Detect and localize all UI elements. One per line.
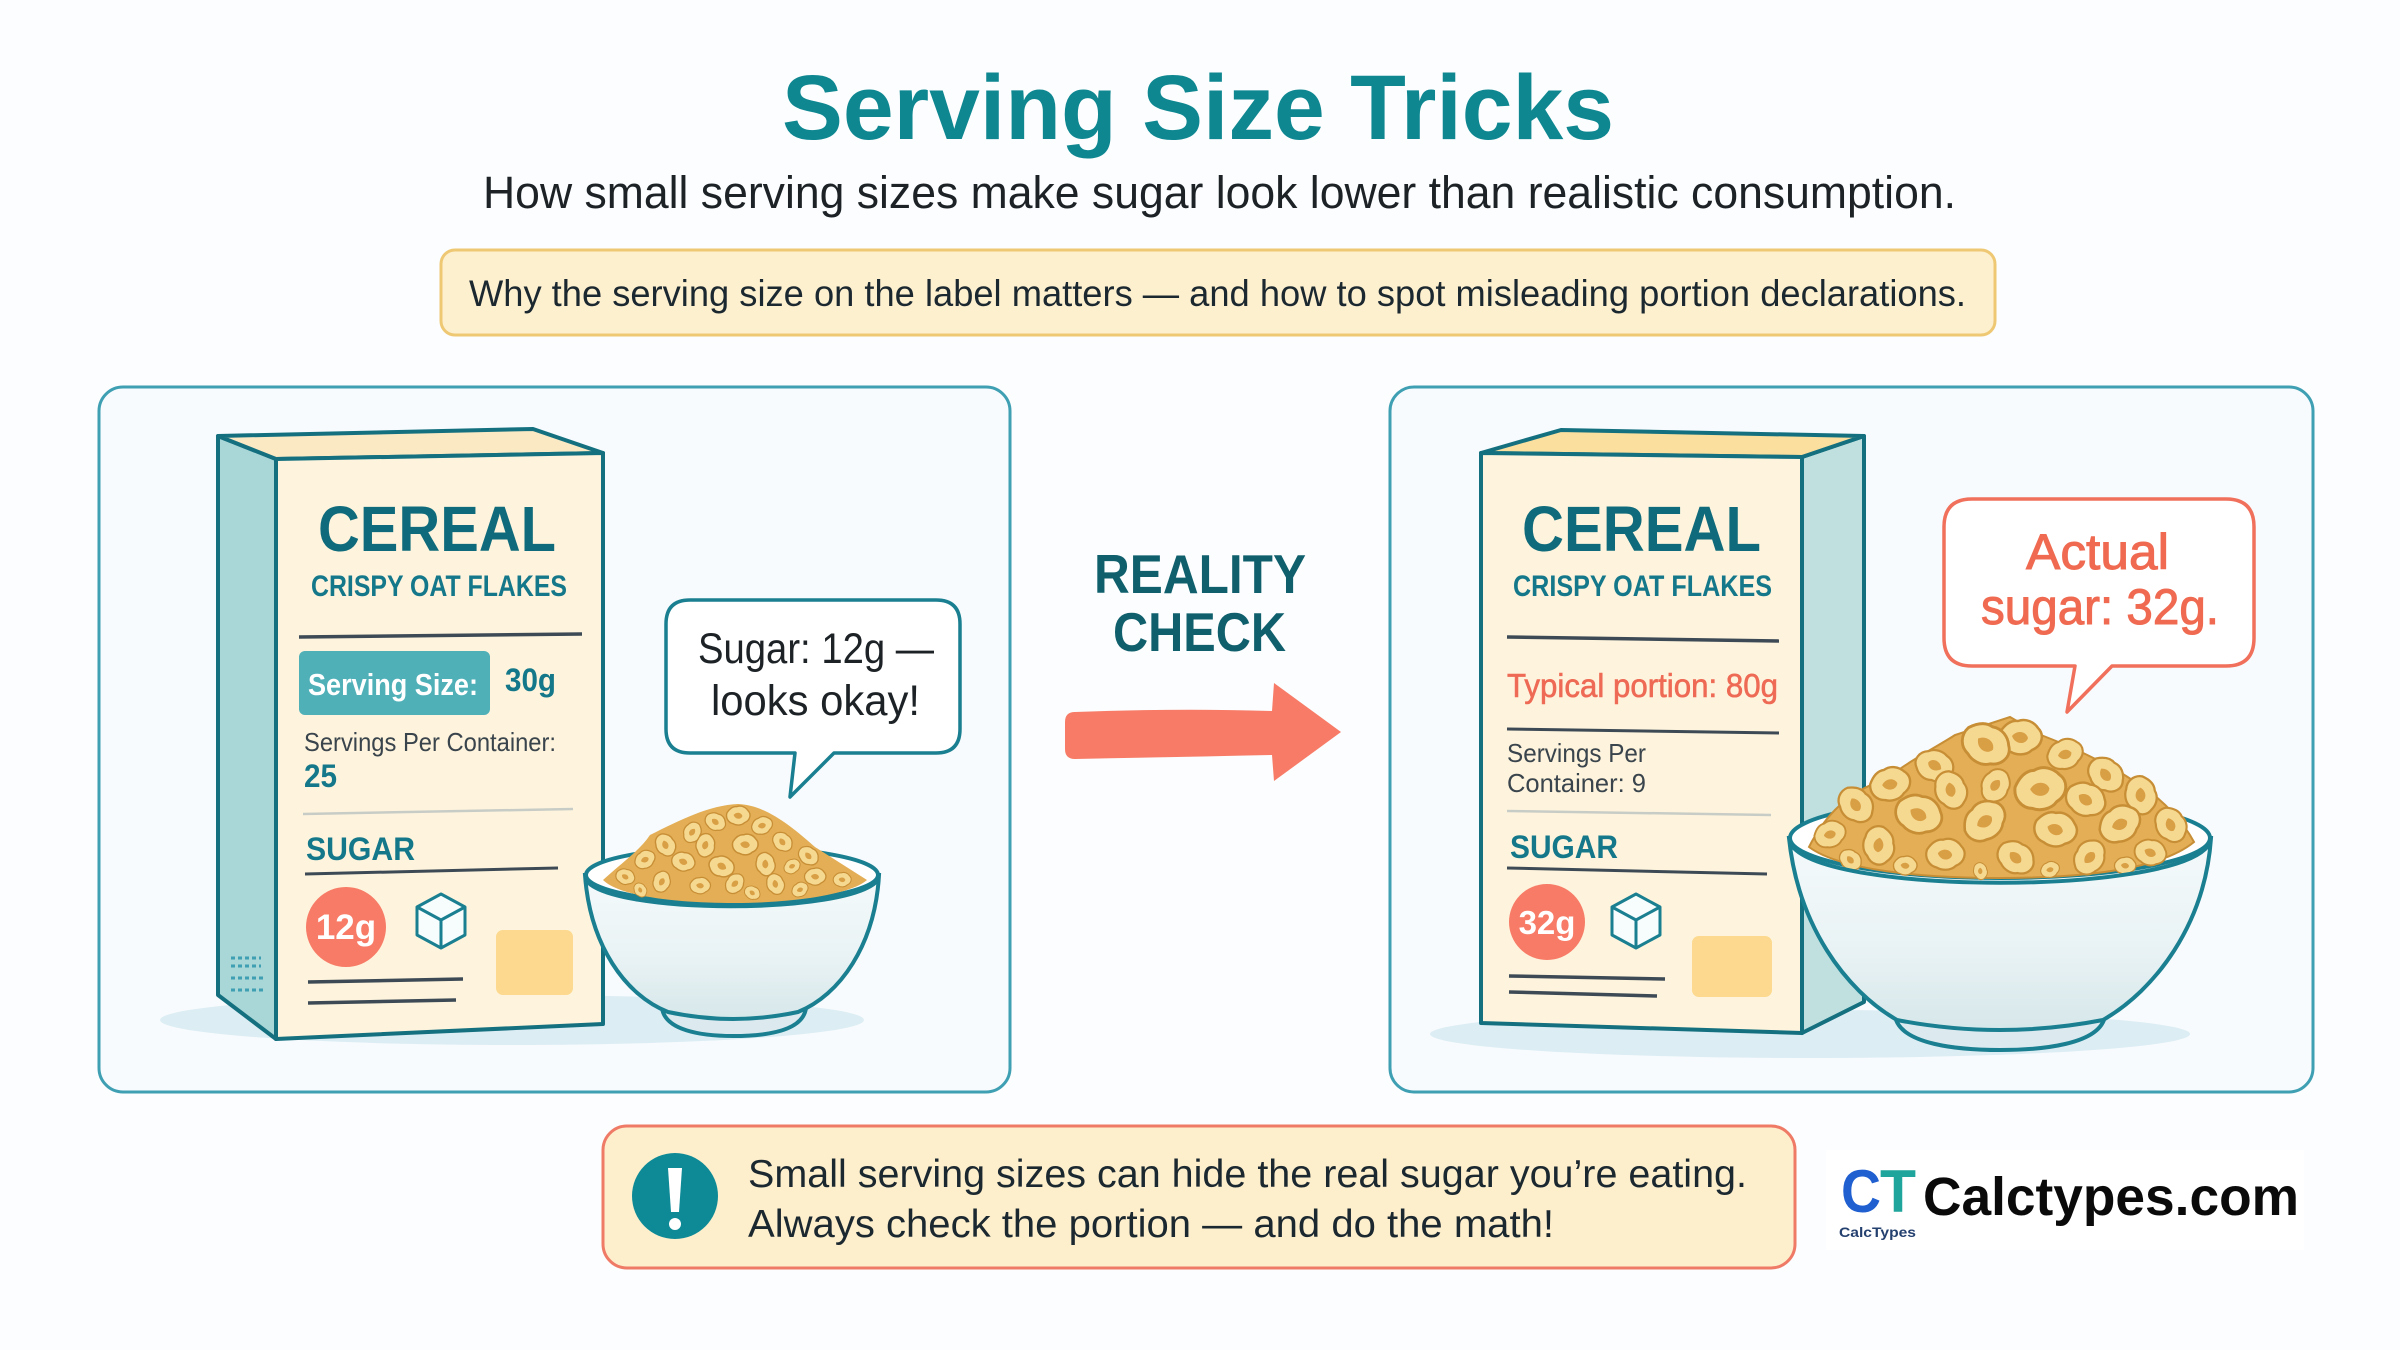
cereal box: realistic: CRISPY OAT FLAKES <box>1513 570 1772 603</box>
logo: Calctypes.com: C <box>1841 1158 1881 1225</box>
logo: Calctypes.com: CalcTypes <box>1839 1224 1916 1240</box>
speech bubble: looks okay: Sugar: 12g — <box>698 625 934 673</box>
cereal box: realistic <box>1481 430 1864 1033</box>
callout: takeaway: Always check the portion — and do the math! <box>748 1203 1554 1246</box>
reality check label <box>1094 543 1306 663</box>
icon: exclamation <box>632 1153 718 1239</box>
subtitle: How small serving sizes make sugar look lower than realistic consumption. <box>483 167 1956 218</box>
callout: takeaway: Small serving sizes can hide the real sugar you’re eating. <box>748 1153 1747 1196</box>
note banner: Why the serving size on the label matters — and how to spot misleading portion declarations. <box>469 273 1966 314</box>
cereal box: small serving: 25 <box>304 758 337 794</box>
cereal box: small serving: Serving Size: <box>308 667 478 702</box>
reality check label: CHECK <box>1113 601 1286 663</box>
speech bubble: actual sugar <box>1944 499 2254 712</box>
logo: Calctypes.com: Calctypes.com <box>1923 1167 2299 1227</box>
speech bubble: looks okay <box>666 600 960 797</box>
cereal box: small serving: CRISPY OAT FLAKES <box>311 570 567 603</box>
cereal box: small serving: Servings Per Container: <box>304 727 556 757</box>
cereal box: realistic: Servings Per <box>1507 738 1646 768</box>
logo: Calctypes.com <box>1826 1150 2304 1250</box>
title: Serving Size Tricks <box>782 57 1614 159</box>
cereal box: small serving: SUGAR <box>306 831 415 867</box>
cereal bowl: small <box>585 804 879 1036</box>
speech bubble: actual sugar: Actual <box>2026 524 2169 580</box>
arrow <box>1065 683 1341 781</box>
cereal box: realistic: 32g <box>1519 904 1575 941</box>
reality check label: REALITY <box>1094 543 1306 605</box>
cereal box: realistic: SUGAR <box>1510 829 1618 865</box>
logo: Calctypes.com: T <box>1880 1158 1916 1225</box>
cereal box: small serving <box>218 429 603 1039</box>
speech bubble: looks okay: looks okay! <box>711 677 920 725</box>
note banner <box>441 250 1995 335</box>
panel: realistic portion <box>1390 387 2313 1092</box>
cereal box: small serving: 30g <box>505 662 556 698</box>
callout: takeaway <box>603 1126 1795 1268</box>
speech bubble: actual sugar: sugar: 32g. <box>1981 579 2219 635</box>
cereal box: small serving: 12g <box>316 908 376 947</box>
cereal bowl: large <box>1789 715 2211 1050</box>
cereal box: small serving: CEREAL <box>318 493 556 565</box>
cereal box: realistic: Typical portion: 80g <box>1507 667 1778 704</box>
cereal box: realistic: Container: 9 <box>1507 768 1646 798</box>
cereal box: realistic: CEREAL <box>1522 493 1761 565</box>
panel: small serving <box>99 387 1010 1092</box>
